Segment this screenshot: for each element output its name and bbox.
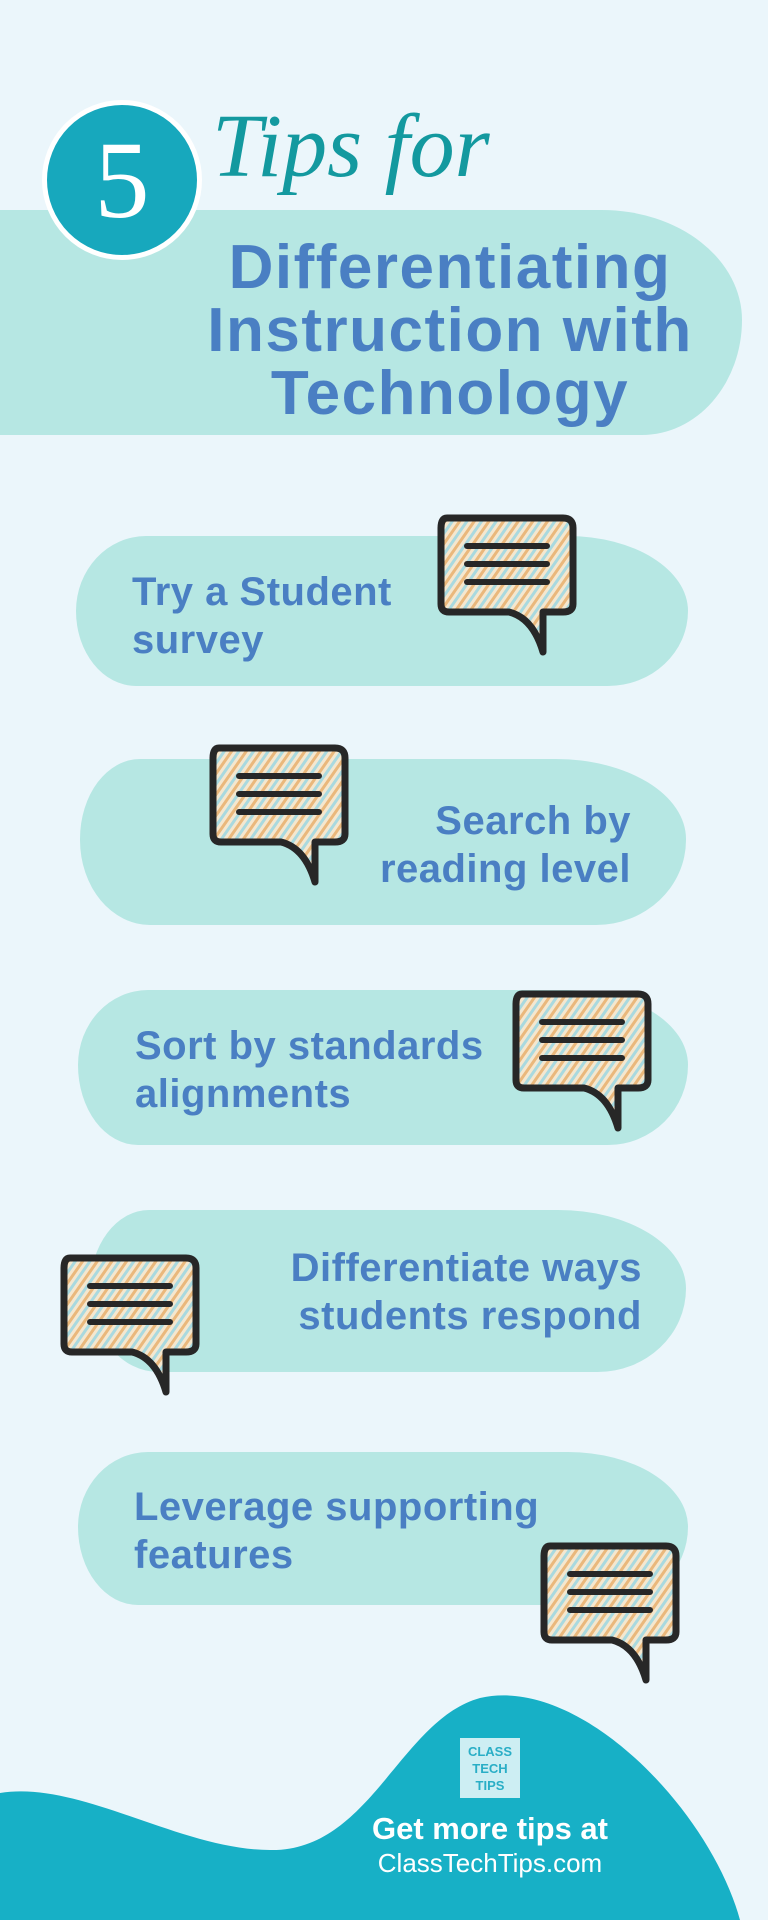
icon: speech bubble 5	[540, 1542, 680, 1684]
header band	[0, 210, 742, 435]
footer text: ClassTechTips.com	[378, 1848, 602, 1878]
panel: tip 4: Differentiate ways	[291, 1246, 642, 1290]
logo: Class Tech Tips	[460, 1738, 520, 1798]
panel: tip 1	[76, 536, 688, 686]
title: Differentiating	[229, 233, 671, 302]
panel: tip 3: Sort by standards	[135, 1024, 484, 1068]
panel: tip 4: students respond	[298, 1294, 642, 1338]
logo: Class Tech Tips: TIPS	[476, 1778, 504, 1793]
panel: tip 2: Search by	[435, 799, 631, 843]
footer text: Get more tips at	[372, 1811, 608, 1846]
panel: tip 1: Try a Student	[132, 570, 392, 614]
panel: tip 3: alignments	[135, 1072, 351, 1116]
title: Technology	[271, 359, 629, 428]
icon: speech bubble 1	[438, 514, 576, 656]
panel: tip 4	[90, 1210, 686, 1372]
panel: tip 5: Leverage supporting	[134, 1485, 539, 1529]
logo: Class Tech Tips: TECH	[472, 1761, 508, 1776]
title	[207, 233, 693, 428]
icon: speech bubble 2	[210, 744, 348, 886]
icon: speech bubble 3	[512, 990, 652, 1132]
panel: tip 5	[78, 1452, 688, 1605]
footer wave	[0, 1695, 740, 1920]
panel: tip 1: survey	[132, 618, 264, 662]
panel: tip 5: features	[134, 1533, 294, 1577]
badge: number 5 circle: 5	[94, 119, 150, 241]
badge: number 5 circle	[42, 100, 202, 260]
heading: Tips for: Tips for	[212, 97, 490, 196]
panel: tip 2: reading level	[380, 847, 631, 891]
icon: speech bubble 4	[60, 1254, 200, 1396]
panel: tip 2	[80, 759, 686, 925]
logo: Class Tech Tips: CLASS	[468, 1744, 512, 1759]
footer text	[372, 1811, 608, 1878]
title: Instruction with	[207, 296, 693, 365]
panel: tip 3	[78, 990, 688, 1145]
